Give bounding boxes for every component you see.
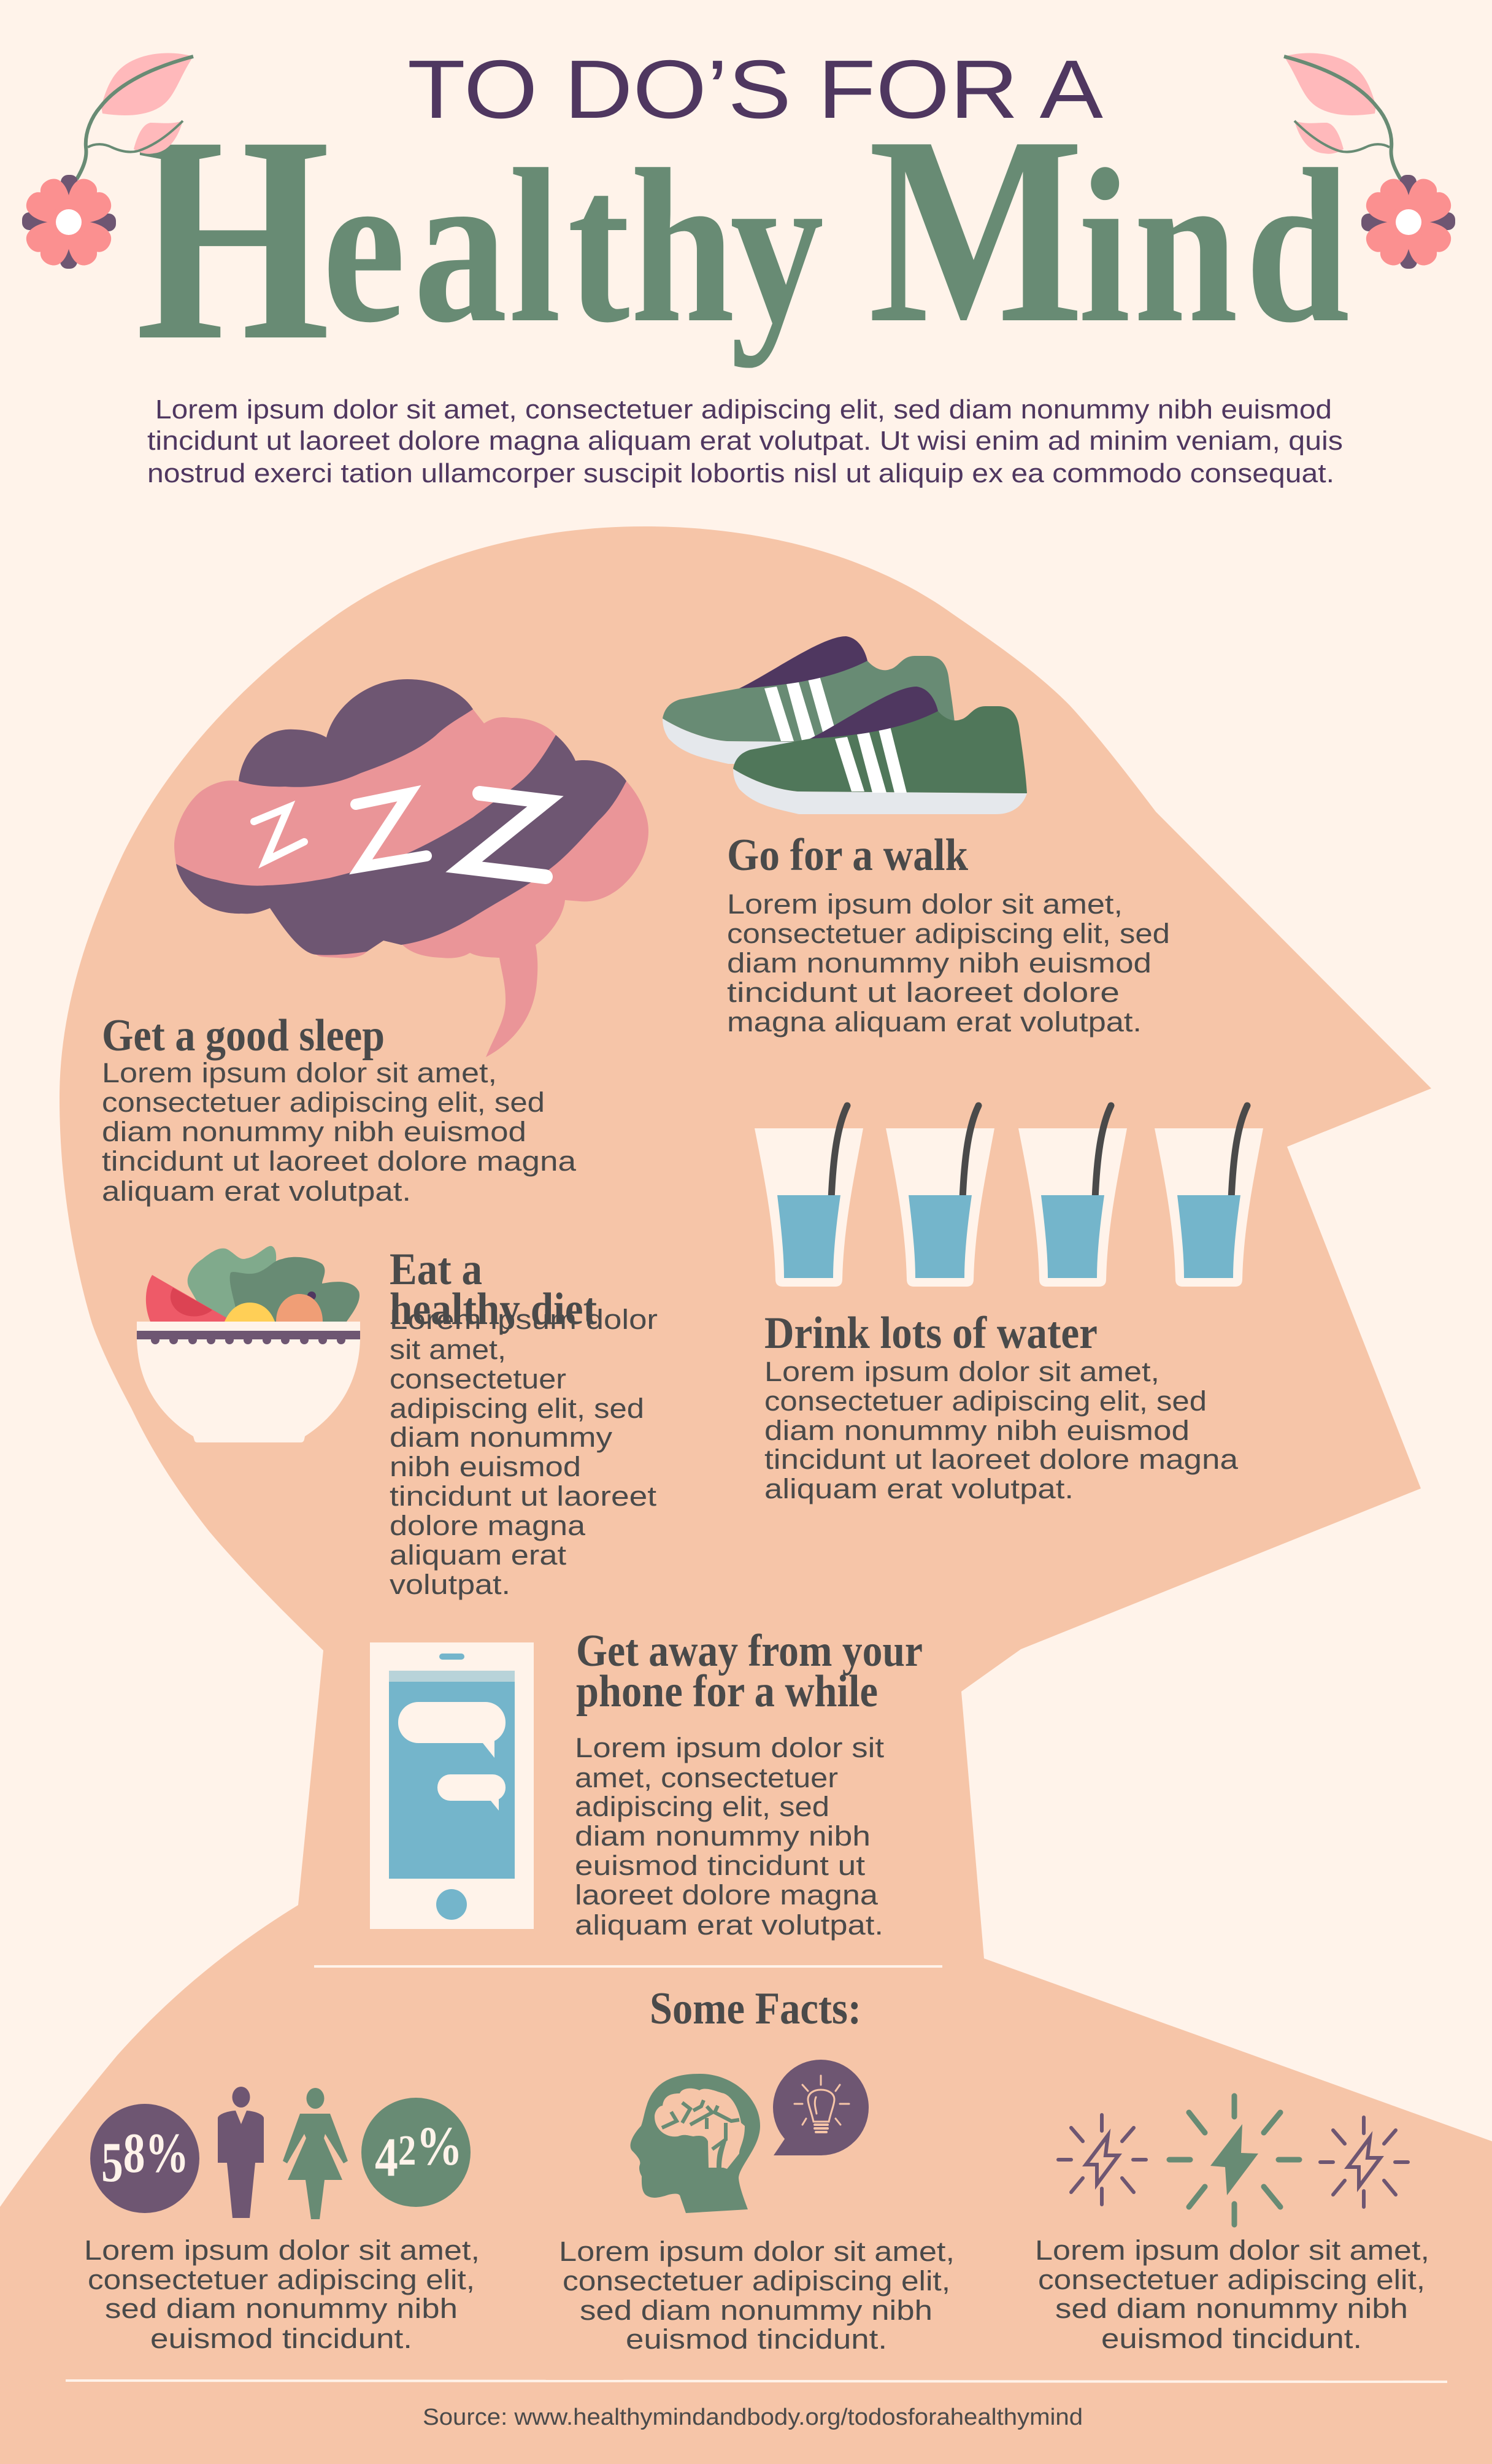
icon: idea speech bubble — [773, 2060, 869, 2155]
body: eat a healthy diet: diam nonummy — [390, 1422, 613, 1453]
title line one: TO DO’S FOR A — [407, 43, 1103, 136]
icon: man — [218, 2087, 264, 2218]
text: gender fact: euismod tincidunt. — [150, 2323, 412, 2354]
icon: smartphone with chat bubbles — [370, 1642, 534, 1929]
text: brain fact: euismod tincidunt. — [626, 2323, 887, 2355]
icon: salad bowl — [137, 1246, 360, 1442]
body: get away from your phone: amet, consectetuer — [575, 1762, 838, 1793]
panel: drink lots of water — [755, 1106, 1263, 1504]
intro text: nostrud exerci tation ullamcorper suscipit lobortis nisl ut aliquip ex ea commodo consequat. — [147, 458, 1334, 488]
chart: 58 percent — [90, 2104, 199, 2213]
body: go for a walk: magna aliquam erat volutpat. — [727, 1006, 1142, 1038]
icon: centre lightning bolt — [1169, 2096, 1299, 2225]
icon: right lightning bolt — [1320, 2117, 1408, 2207]
text: energy fact: euismod tincidunt. — [1101, 2323, 1362, 2354]
heading: get away from your phone: phone for a while — [576, 1666, 878, 1717]
body: eat a healthy diet: consectetuer — [390, 1363, 566, 1395]
panel: energy fact — [1035, 2096, 1429, 2354]
heading: go for a walk: Go for a walk — [727, 830, 969, 880]
body: get away from your phone: adipiscing elit, sed — [575, 1791, 829, 1822]
chart: 42 percent: 2 — [398, 2127, 416, 2174]
title line two: M — [868, 81, 1084, 379]
text: gender fact — [84, 2235, 480, 2354]
body: drink lots of water: aliquam erat volutpat. — [764, 1473, 1074, 1504]
chart: 42 percent: % — [416, 2116, 463, 2177]
panel: gender fact — [84, 2087, 480, 2354]
intro text — [147, 395, 1343, 488]
head silhouette — [0, 526, 1492, 2464]
source line: Source: www.healthymindandbody.org/todosforahealthymind — [423, 2404, 1083, 2430]
body: drink lots of water: diam nonummy nibh euismod — [764, 1415, 1190, 1446]
body: get away from your phone: Lorem ipsum dolor sit — [575, 1732, 885, 1763]
text: gender fact: consectetuer adipiscing elit, — [88, 2264, 475, 2295]
text: energy fact: consectetuer adipiscing elit, — [1038, 2264, 1425, 2295]
text: gender fact: sed diam nonummy nibh — [105, 2293, 458, 2324]
title line two: ealthy — [322, 124, 824, 369]
body: drink lots of water — [764, 1356, 1239, 1504]
title line two: ind — [1079, 124, 1350, 369]
icon: right flower with leaves — [1284, 53, 1456, 270]
chart: 58 percent: 5 — [101, 2131, 123, 2193]
text: brain fact: Lorem ipsum dolor sit amet, — [559, 2236, 955, 2267]
body: get a good sleep: consectetuer adipiscing elit, sed — [102, 1087, 545, 1118]
body: get away from your phone — [575, 1732, 885, 1941]
body: go for a walk: consectetuer adipiscing elit, sed — [727, 918, 1170, 949]
body: get away from your phone: laoreet dolore magna — [575, 1879, 879, 1911]
body: eat a healthy diet: tincidunt ut laoreet — [390, 1480, 657, 1512]
text: energy fact: sed diam nonummy nibh — [1055, 2293, 1408, 2324]
body: get away from your phone: euismod tincidunt ut — [575, 1850, 866, 1881]
body: eat a healthy diet: dolore magna — [390, 1510, 586, 1541]
icon: sleeping brain — [174, 679, 648, 1057]
body: get a good sleep: aliquam erat volutpat. — [102, 1176, 411, 1207]
title — [136, 43, 1350, 402]
text: brain fact: consectetuer adipiscing elit, — [563, 2265, 950, 2297]
icon: left lightning bolt — [1058, 2115, 1146, 2204]
icon: four glasses of water — [755, 1106, 1263, 1287]
heading: eat a healthy diet: healthy diet — [390, 1284, 597, 1334]
panel: get a good sleep — [102, 679, 648, 1207]
intro text: Lorem ipsum dolor sit amet, consectetuer adipiscing elit, sed diam nonummy nibh euismod — [155, 395, 1332, 425]
icon: pair of sneakers — [663, 636, 1027, 814]
panel: get away from your phone — [370, 1626, 923, 1941]
body: get a good sleep: tincidunt ut laoreet dolore magna — [102, 1145, 577, 1177]
icon: left flower with leaves — [21, 53, 193, 270]
body: eat a healthy diet: aliquam erat — [390, 1539, 567, 1571]
heading: get away from your phone: Get away from your — [576, 1626, 923, 1676]
body: go for a walk — [727, 888, 1170, 1038]
body: eat a healthy diet: adipiscing elit, sed — [390, 1393, 644, 1424]
body: eat a healthy diet: Lorem ipsum dolor — [390, 1304, 658, 1335]
text: gender fact: Lorem ipsum dolor sit amet, — [84, 2235, 480, 2266]
body: drink lots of water: consectetuer adipiscing elit, sed — [764, 1385, 1207, 1417]
heading: get a good sleep: Get a good sleep — [102, 1011, 385, 1061]
text: brain fact: sed diam nonummy nibh — [580, 2295, 932, 2326]
intro text: tincidunt ut laoreet dolore magna aliquam erat volutpat. Ut wisi enim ad minim veniam, quis — [147, 426, 1343, 456]
body: get a good sleep — [102, 1057, 577, 1207]
body: drink lots of water: tincidunt ut laoreet dolore magna — [764, 1444, 1239, 1475]
heading: eat a healthy diet: Eat a — [390, 1244, 482, 1295]
body: go for a walk: diam nonummy nibh euismod — [727, 947, 1152, 979]
body: get a good sleep: Lorem ipsum dolor sit amet, — [102, 1057, 497, 1088]
chart: 42 percent — [361, 2098, 471, 2207]
panel: go for a walk — [663, 636, 1170, 1038]
body: eat a healthy diet: volutpat. — [390, 1569, 510, 1600]
body: get away from your phone: aliquam erat volutpat. — [575, 1909, 883, 1941]
text: energy fact: Lorem ipsum dolor sit amet, — [1035, 2235, 1429, 2266]
body: get away from your phone: diam nonummy nibh — [575, 1820, 871, 1852]
panel: eat a healthy diet — [137, 1244, 658, 1600]
body: drink lots of water: Lorem ipsum dolor sit amet, — [764, 1356, 1159, 1387]
body: go for a walk: Lorem ipsum dolor sit amet, — [727, 888, 1123, 920]
body: get a good sleep: diam nonummy nibh euismod — [102, 1116, 526, 1147]
heading: eat a healthy diet — [390, 1244, 597, 1334]
icon: head with brain — [631, 2074, 760, 2213]
title line two: H — [136, 75, 330, 402]
text: brain fact — [559, 2236, 955, 2355]
body: eat a healthy diet: nibh euismod — [390, 1451, 581, 1482]
body: eat a healthy diet — [390, 1304, 658, 1600]
body: eat a healthy diet: sit amet, — [390, 1334, 506, 1365]
chart: 42 percent: 4 — [375, 2127, 398, 2188]
heading: some facts: Some Facts: — [650, 1984, 861, 2034]
body: go for a walk: tincidunt ut laoreet dolore — [727, 977, 1120, 1008]
icon: woman — [283, 2088, 348, 2219]
text: energy fact — [1035, 2235, 1429, 2354]
chart: 58 percent: 8% — [123, 2122, 189, 2184]
panel: brain fact — [559, 2060, 955, 2355]
heading: drink lots of water: Drink lots of water — [764, 1308, 1098, 1358]
heading: get away from your phone — [576, 1626, 923, 1717]
